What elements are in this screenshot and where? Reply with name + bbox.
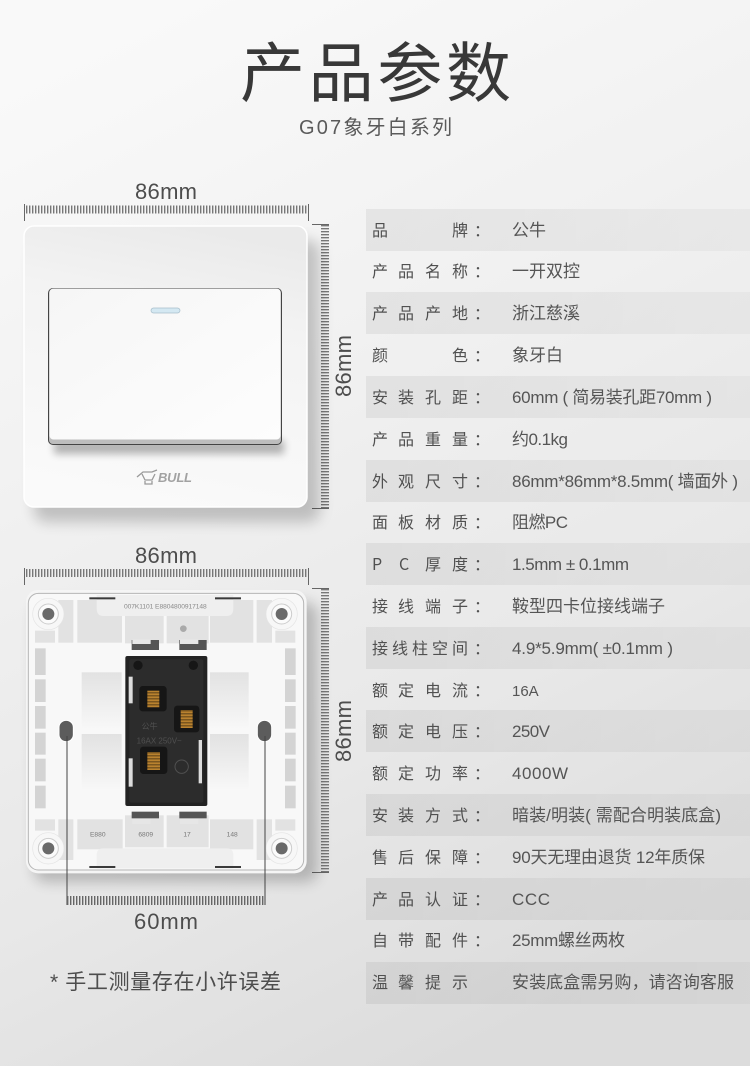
dimension: right height [312,588,356,872]
row: hole distance [366,376,750,418]
row: product name: 产品名称： [372,258,490,282]
row: accessories: 自带配件： [372,927,490,951]
footnote: * 手工测量存在小许误差 [50,971,281,994]
dimension: top width: 86mm [135,543,197,568]
corner screw holes [33,598,297,864]
row: hole distance: 60mm ( 简易装孔距70mm ) [512,388,712,407]
row: tips [366,962,750,1004]
row: brand: 公牛 [512,221,546,240]
black terminal module: 16AX 250V~ [137,736,182,745]
row: PC thickness: 1.5mm ± 0.1mm [512,555,629,574]
row: rated voltage [366,710,750,752]
subtitle: G07象牙白系列 [299,116,452,139]
moulded marks: E880 [90,832,106,839]
row: rated power [372,760,568,784]
parameter table [366,209,750,1004]
back view: switch with dimensions [24,543,356,934]
row: installation: 安装方式： [372,802,490,826]
moulded marks [90,604,238,839]
row: installation [366,794,750,836]
row: tips: 温馨提示 [372,969,468,993]
side windows [35,648,296,808]
row: brand [366,209,750,251]
row: product name [372,258,580,282]
row: after-sales: 90天无理由退货 12年质保 [512,848,705,867]
row: colour [372,342,563,366]
row: accessories [372,927,625,951]
dimension: top width [24,179,308,221]
row: PC thickness [366,543,750,585]
row: installation: 暗装/明装( 需配合明装底盒) [512,806,721,825]
row: colour: 象牙白 [512,346,563,365]
metal clips [132,640,207,818]
row: hole distance: 安装孔距： [372,384,490,408]
row: tips: 安装底盒需另购，请咨询客服 [512,973,734,992]
row: terminal space: 接线柱空间： [372,635,490,659]
row: rated voltage: 250V [512,722,551,741]
row: rated power: 额定功率： [372,760,490,784]
row: rated current: 16A [512,683,539,700]
row: terminal [372,593,665,617]
rocker button [48,288,284,454]
oblong mounting slots [59,720,272,742]
row: weight: 约0.1kg [512,430,568,449]
row: weight [372,426,568,450]
title: 产品参数 [240,21,511,115]
row: dimensions: 86mm*86mm*8.5mm( 墙面外 ) [512,472,738,491]
row: certification: 产品认证： [372,886,490,910]
row: origin: 产品产地： [372,300,490,324]
dimension: hole spacing 60mm: 60mm [134,909,198,934]
logo: BULL: BULL [158,470,192,485]
row: rated current: 额定电流： [372,677,490,701]
dimension: right height: 86mm [331,700,356,762]
moulded marks: 007K1101 E8804800917148 [124,604,207,611]
row: panel material: 面板材质： [372,509,490,533]
row: terminal space [366,627,750,669]
back plate [26,590,318,882]
switch panel [24,226,320,522]
black terminal module: 公牛 [142,721,158,732]
front view: switch with dimensions [24,179,356,522]
logo: BULL [137,470,192,485]
row: rated power: 4000W [512,764,568,783]
dimension: right height: 86mm [331,335,356,397]
row: dimensions [366,460,750,502]
dimension: right height [312,224,356,508]
mounting tabs [97,595,233,616]
row: origin: 浙江慈溪 [512,304,580,323]
row: terminal: 接线端子： [372,593,490,617]
row: after-sales [372,844,705,868]
row: certification: CCC [512,890,550,909]
row: colour: 颜色： [372,342,490,366]
row: product name: 一开双控 [512,262,580,281]
black terminal module [125,656,207,806]
row: panel material: 阻燃PC [512,513,568,532]
top and bottom windows [35,600,295,860]
row: origin [366,292,750,334]
row: PC thickness: PC厚度： [372,551,490,575]
dimension: top width: 86mm [135,179,197,204]
row: terminal: 鞍型四卡位接线端子 [512,597,665,616]
row: after-sales: 售后保障： [372,844,490,868]
dimension: top width [24,543,308,585]
row: rated voltage: 额定电压： [372,718,490,742]
indicator light [151,308,180,313]
moulded marks: 6809 [138,832,153,839]
moulded marks: 17 [183,832,191,839]
row: terminal space: 4.9*5.9mm( ±0.1mm ) [512,639,673,658]
row: panel material [372,509,568,533]
row: certification [366,878,750,920]
moulded marks: 148 [227,832,238,839]
row: weight: 产品重量： [372,426,490,450]
row: brand: 品牌： [372,217,490,241]
recessed squares [82,672,249,791]
row: accessories: 25mm螺丝两枚 [512,931,625,950]
row: dimensions: 外观尺寸： [372,468,490,492]
